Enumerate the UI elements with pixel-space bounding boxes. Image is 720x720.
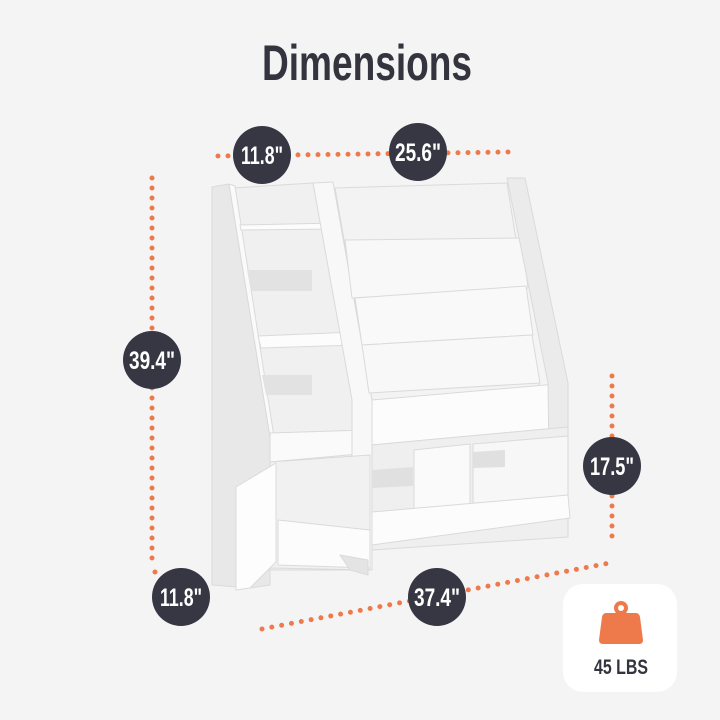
dimension label: bottom depth 11.8: 11.8" <box>160 584 202 612</box>
dimension label: top width 25.6 <box>389 123 447 181</box>
left tower shelves <box>240 223 336 230</box>
left tower back <box>232 183 370 570</box>
bookshelf illustration <box>212 178 570 590</box>
dimension label: lower height 17.5 <box>583 437 641 495</box>
dimension label: top depth 11.8: 11.8" <box>241 142 283 170</box>
dimension label: bottom width 37.4: 37.4" <box>414 584 460 612</box>
left cabinet <box>270 455 370 570</box>
dimension label: height 39.4: 39.4" <box>129 347 175 375</box>
dimension label: top depth 11.8 <box>233 126 291 184</box>
legs <box>340 555 368 575</box>
back panel <box>335 183 540 400</box>
bottom cubbies <box>372 427 568 550</box>
left side panel <box>212 184 270 588</box>
dotted dimension lines <box>152 152 615 629</box>
dimension label: height 39.4 <box>123 331 181 389</box>
dimension label: top width 25.6: 25.6" <box>395 139 441 167</box>
weight card <box>563 584 677 692</box>
open door <box>236 463 276 590</box>
dimension label: lower height 17.5: 17.5" <box>590 453 634 481</box>
weight text: 45 LBS <box>594 656 648 679</box>
magazine slats <box>345 238 528 298</box>
dimension label: bottom depth 11.8 <box>152 568 210 626</box>
middle divider <box>313 182 372 570</box>
title: Dimensions <box>262 35 472 91</box>
dimension label: bottom width 37.4 <box>408 568 466 626</box>
icon: weight <box>599 601 643 644</box>
right side panel <box>507 178 568 537</box>
